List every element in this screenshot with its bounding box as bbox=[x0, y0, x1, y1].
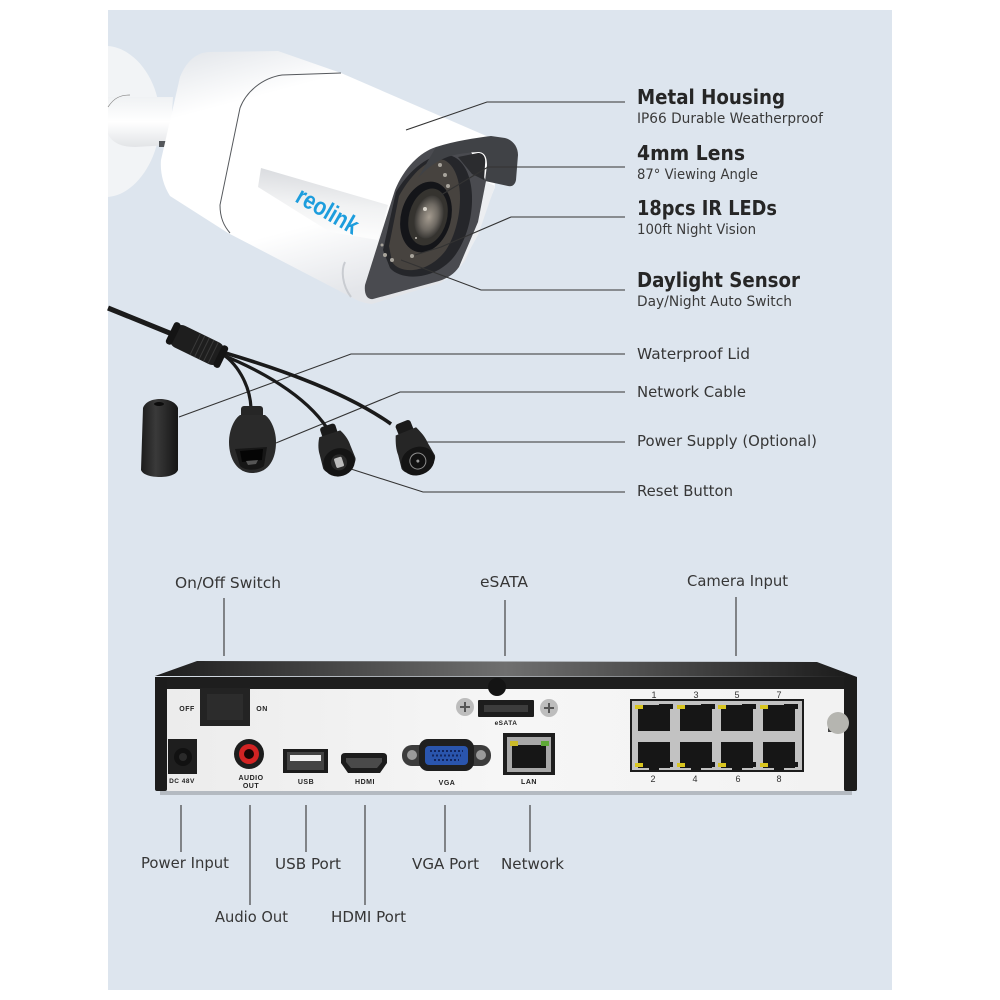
label: lens: 87° Viewing Angle bbox=[637, 167, 758, 183]
power switch: OFF bbox=[179, 706, 195, 713]
LAN port bbox=[503, 733, 555, 786]
port numbers: 4 bbox=[692, 774, 698, 784]
port numbers: 7 bbox=[776, 690, 782, 700]
camera feature labels bbox=[637, 85, 824, 310]
top screw bbox=[488, 678, 506, 696]
label: HDMI port: HDMI Port bbox=[331, 908, 406, 926]
infrared LEDs bbox=[380, 163, 450, 262]
label: lens: 4mm Lens bbox=[637, 141, 745, 165]
status lights bbox=[635, 705, 768, 767]
label: on/off switch: On/Off Switch bbox=[175, 574, 281, 592]
port latch notches bbox=[649, 704, 798, 770]
white side trim bbox=[444, 181, 495, 281]
ethernet ports bbox=[638, 705, 795, 768]
label: lens bbox=[637, 141, 758, 183]
label: IR LEDs bbox=[637, 196, 777, 238]
power connector bbox=[385, 415, 440, 481]
DC power jack: DC 48V bbox=[169, 778, 195, 785]
recorder lid bbox=[155, 661, 857, 677]
label: daylight sensor: Daylight Sensor bbox=[637, 268, 800, 292]
body seam bbox=[220, 73, 341, 233]
VGA port bbox=[402, 739, 491, 787]
reolink logo: reolink bbox=[291, 182, 364, 240]
port numbers: 8 bbox=[776, 774, 782, 784]
cable junction bbox=[165, 321, 229, 369]
label: audio out: Audio Out bbox=[215, 908, 288, 926]
reset connector bbox=[311, 420, 360, 481]
eSATA port: eSATA bbox=[495, 720, 517, 727]
NVR leader lines bbox=[181, 597, 736, 905]
infrared LED window bbox=[389, 159, 460, 270]
eSATA port bbox=[456, 698, 558, 727]
thumb screw bbox=[827, 712, 849, 734]
power switch bbox=[179, 688, 268, 726]
label: metal housing bbox=[637, 85, 824, 127]
metal plate bbox=[167, 689, 844, 791]
front band bbox=[155, 677, 857, 689]
port numbers: 2 bbox=[650, 774, 656, 784]
VGA port: VGA bbox=[439, 780, 455, 787]
label: network: Network bbox=[501, 855, 564, 873]
NVR top labels bbox=[175, 572, 788, 592]
front bezel bbox=[365, 147, 486, 299]
port numbers bbox=[650, 690, 782, 784]
port numbers: 3 bbox=[693, 690, 699, 700]
shadow bbox=[160, 791, 852, 795]
label: network cable: Network Cable bbox=[637, 383, 746, 401]
camera leader lines bbox=[179, 102, 625, 492]
label: IR LEDs: 100ft Night Vision bbox=[637, 222, 756, 238]
HDMI port bbox=[341, 753, 387, 786]
background panel bbox=[108, 10, 892, 990]
USB port bbox=[283, 749, 328, 786]
waterproof lid bbox=[141, 399, 178, 477]
wall mount bracket bbox=[108, 46, 173, 197]
cable branches bbox=[219, 352, 391, 428]
body foot notch bbox=[343, 262, 351, 297]
dark face ring bbox=[383, 155, 472, 277]
NVR recorder rear panel bbox=[155, 661, 857, 795]
sun hood bbox=[418, 136, 518, 186]
camera input switch block bbox=[630, 690, 804, 784]
lens bbox=[393, 176, 459, 258]
main cable bbox=[108, 308, 172, 334]
power switch: ON bbox=[256, 706, 268, 713]
hood interior bbox=[458, 153, 485, 180]
LAN port: LAN bbox=[521, 779, 537, 786]
label: daylight sensor: Day/Night Auto Switch bbox=[637, 294, 792, 310]
label: power supply: Power Supply (Optional) bbox=[637, 432, 817, 450]
label: daylight sensor bbox=[637, 268, 800, 310]
label: USB port: USB Port bbox=[275, 855, 341, 873]
port numbers: 6 bbox=[735, 774, 741, 784]
port numbers: 5 bbox=[734, 690, 740, 700]
label: IR LEDs: 18pcs IR LEDs bbox=[637, 196, 777, 220]
label: eSATA: eSATA bbox=[480, 573, 529, 591]
label: waterproof lid: Waterproof Lid bbox=[637, 345, 750, 363]
camera body bbox=[161, 51, 495, 304]
left edge bbox=[155, 677, 167, 791]
HDMI port: HDMI bbox=[355, 779, 375, 786]
label: reset button: Reset Button bbox=[637, 482, 733, 500]
NVR bottom labels bbox=[141, 854, 564, 926]
audio out jack: OUT bbox=[243, 783, 259, 790]
audio out jack bbox=[234, 739, 264, 790]
cable labels bbox=[637, 345, 817, 500]
label: VGA port: VGA Port bbox=[412, 855, 479, 873]
camera cable assembly bbox=[108, 308, 440, 481]
right edge bbox=[844, 677, 857, 791]
USB port: USB bbox=[298, 779, 314, 786]
port numbers: 1 bbox=[651, 690, 657, 700]
label: metal housing: Metal Housing bbox=[637, 85, 785, 109]
label: camera input: Camera Input bbox=[687, 572, 788, 590]
audio out jack: AUDIO bbox=[238, 775, 264, 782]
label: metal housing: IP66 Durable Weatherproof bbox=[637, 111, 824, 127]
label: power input: Power Input bbox=[141, 854, 229, 872]
logo recess bbox=[258, 168, 388, 240]
DC power jack bbox=[168, 739, 197, 785]
camera illustration bbox=[108, 46, 518, 304]
network connector bbox=[229, 406, 276, 473]
